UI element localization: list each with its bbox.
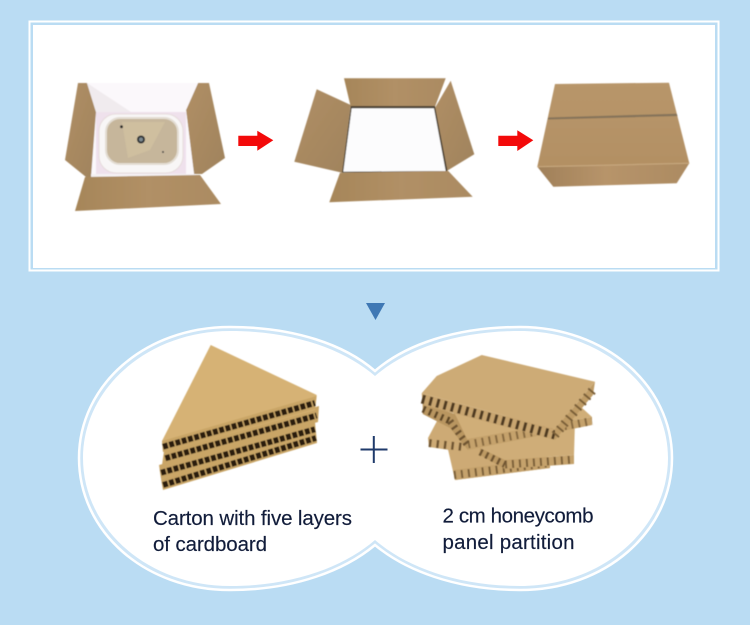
panel: packing steps <box>30 22 718 270</box>
icon: downward triangle <box>366 303 385 320</box>
caption: honeycomb: 2 cm honeycomb <box>442 504 594 528</box>
icon: plus sign <box>360 436 388 463</box>
photo: open carton with foam lid <box>294 78 474 202</box>
caption: carton: Carton with five layers <box>153 507 352 530</box>
arrow: step two to three <box>498 130 533 151</box>
image: stacked corrugated cardboard sheets <box>159 345 319 490</box>
arrow: step one to two <box>238 131 273 151</box>
caption: honeycomb <box>442 504 594 554</box>
panel: two-lobed materials panel <box>79 327 672 590</box>
photo: open carton with sink in foam <box>65 83 225 211</box>
caption: carton: of cardboard <box>153 533 267 556</box>
photo: closed taped carton <box>537 83 689 187</box>
image: stacked honeycomb panels <box>422 355 595 480</box>
caption: carton <box>153 507 352 556</box>
caption: honeycomb: panel partition <box>442 531 574 554</box>
